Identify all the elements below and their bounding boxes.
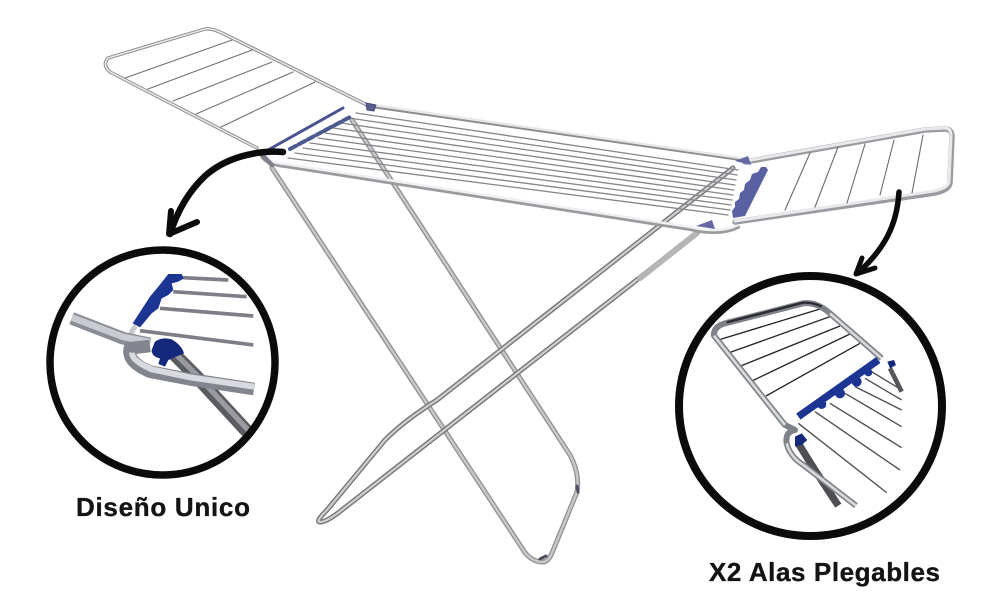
- circle ring: [50, 250, 275, 475]
- right wing: [735, 128, 952, 222]
- right blue wire holder: [732, 167, 768, 218]
- centre rack top rail: [372, 105, 747, 160]
- legs close-up: [798, 368, 902, 506]
- blue knobs close-up: [795, 360, 896, 447]
- arrow to folding wings circle: [856, 192, 899, 274]
- circle ring: [679, 276, 942, 536]
- label: unique design: Diseño Unico: [76, 492, 250, 522]
- leg close-up: [173, 352, 249, 432]
- wing wires close-up: [718, 309, 860, 396]
- blue knob close-up: [152, 338, 184, 367]
- rack wires close-up: [140, 278, 253, 345]
- wing frame close-up: [714, 303, 882, 506]
- left wing: [105, 29, 367, 148]
- circle interior detail: [714, 303, 902, 506]
- centre rack wires: [288, 113, 738, 215]
- blue band close-up: [798, 360, 878, 417]
- right folding legs: [319, 168, 733, 522]
- blue holder close-up: [133, 274, 184, 327]
- frame tube close-up: [72, 317, 254, 389]
- arrow to unique design circle: [169, 152, 283, 234]
- circle interior detail: [72, 274, 254, 432]
- detail circle: folding wings: [679, 276, 942, 536]
- label: two folding wings: X2 Alas Plegables: [709, 557, 940, 587]
- blue corner clip top left: [366, 103, 376, 111]
- detail circle: unique design: [50, 250, 275, 475]
- left blue wire holder: [262, 108, 350, 165]
- blue corner clips right: [696, 156, 751, 229]
- left folding legs: [272, 120, 578, 562]
- rack wires close-up: [798, 372, 902, 493]
- drying rack: [105, 29, 952, 562]
- centre rack bottom rail: [262, 155, 738, 232]
